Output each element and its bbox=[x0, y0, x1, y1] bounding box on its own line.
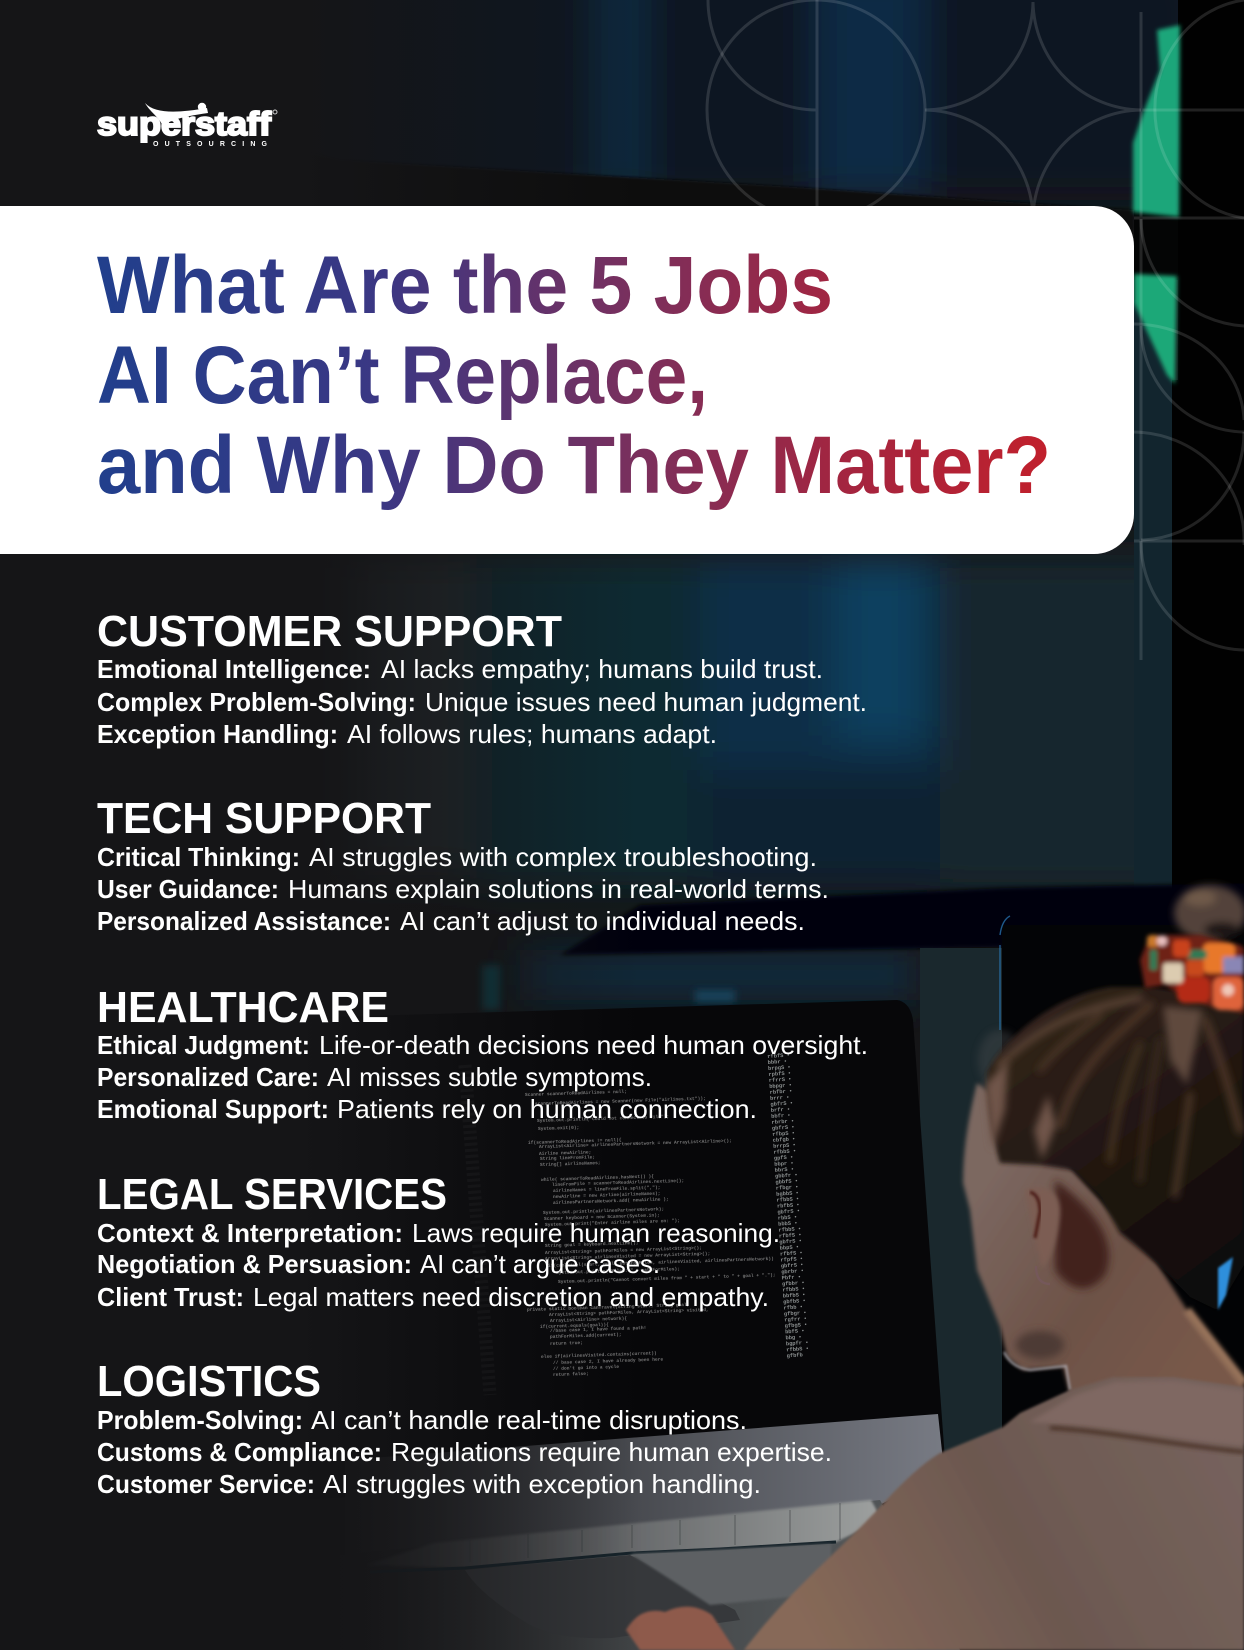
person: neck and face bbox=[963, 1083, 1244, 1395]
code on monitor: ArrayList<String> airlinesVisited = new ArrayList<String>(); bbox=[545, 1251, 710, 1262]
code right column bbox=[767, 1053, 809, 1359]
code on monitor: System.out.println(airlinesPartnersNetwork); bbox=[543, 1206, 664, 1216]
code right column: bbfS • bbox=[785, 1328, 805, 1335]
photo: side fade bbox=[0, 0, 640, 1650]
line: critical thinking: AI struggles with complex troubleshooting. bbox=[309, 842, 817, 872]
line: emotional support: Patients rely on human connection. bbox=[337, 1094, 757, 1124]
person: shoulder strap bbox=[1187, 1310, 1244, 1383]
person: black strip behind neck bbox=[1190, 1240, 1244, 1395]
section: tech support bbox=[97, 794, 829, 936]
line: personalized assistance: Personalized Assistance: bbox=[97, 906, 391, 936]
line: context and interpretation bbox=[97, 1218, 780, 1248]
line: negotiation and persuasion: Negotiation & Persuasion: bbox=[97, 1249, 412, 1279]
photo: monitor bezel bbox=[345, 1414, 944, 1555]
person: shadow under jaw bbox=[1016, 1331, 1064, 1359]
code right column: rfbfS • bbox=[780, 1250, 803, 1258]
line: client trust: Legal matters need discretion and empathy. bbox=[253, 1282, 769, 1312]
line: customer service: Customer Service: bbox=[97, 1469, 315, 1499]
code right column: rfbbS • bbox=[778, 1226, 801, 1234]
code right column: bgbbS • bbox=[776, 1190, 799, 1198]
code on monitor: return false; bbox=[553, 1371, 589, 1378]
photo: desk bbox=[340, 1500, 960, 1650]
line: customs and compliance: Regulations require human expertise. bbox=[391, 1437, 832, 1467]
section: customer support bbox=[97, 607, 867, 749]
line: emotional support bbox=[97, 1094, 757, 1124]
line: negotiation and persuasion: AI can’t argue cases. bbox=[420, 1249, 660, 1279]
person: hair root near bun bbox=[1163, 1006, 1203, 1085]
code right column: bbpgr • bbox=[769, 1082, 792, 1090]
code right column: gbfbS • bbox=[783, 1298, 806, 1305]
line: complex problem-solving: Complex Problem-Solving: bbox=[97, 687, 416, 717]
line: personalized care bbox=[97, 1062, 652, 1092]
line: problem-solving: AI can’t handle real-time disruptions. bbox=[311, 1405, 747, 1435]
code on monitor: System.out.println("Miles: " + pathForMiles); bbox=[556, 1266, 680, 1276]
person: sweater bbox=[744, 1377, 1244, 1650]
code on monitor: else if(airlinesVisited.contains(current)) bbox=[541, 1350, 657, 1360]
code right column: rbbS • bbox=[778, 1214, 797, 1222]
code right column: brrpS • bbox=[773, 1142, 796, 1150]
code right column: bbbS • bbox=[778, 1220, 798, 1228]
geometric line pattern bbox=[707, 0, 1244, 660]
line: ethical judgment bbox=[97, 1030, 868, 1060]
code right column: gbfrS • bbox=[770, 1100, 793, 1108]
line: emotional support: Emotional Support: bbox=[97, 1094, 329, 1124]
code right column: rfbgr • bbox=[776, 1184, 799, 1192]
line: personalized assistance bbox=[97, 906, 805, 936]
title card bbox=[0, 206, 1134, 554]
code right column: rbfbS • bbox=[777, 1202, 800, 1210]
code right column: rfbpS • bbox=[772, 1130, 795, 1138]
code on monitor: // don't go into a cycle bbox=[553, 1364, 619, 1372]
code right column: gbbfS • bbox=[775, 1178, 798, 1186]
code right column: gfbbr • bbox=[782, 1280, 805, 1288]
line: client trust: Client Trust: bbox=[97, 1282, 244, 1312]
code right column: rgfrr • bbox=[784, 1316, 807, 1323]
code on monitor: ArrayList<String> pathForMiles = new ArrayList<String>(); bbox=[545, 1245, 702, 1256]
line: personalized care: Personalized Care: bbox=[97, 1062, 319, 1092]
code right column: cbfgb • bbox=[773, 1136, 796, 1144]
line: emotional intelligence: AI lacks empathy; humans build trust. bbox=[381, 654, 823, 684]
code on monitor: System.out.println("Cannot convert miles from " + start + " to " + goal + "."); bbox=[558, 1272, 776, 1285]
code on monitor: String goal = keyboard.nextLine(); bbox=[545, 1240, 639, 1249]
code on monitor: private static boolean canTravel(String start, String goal, bbox=[527, 1302, 690, 1313]
photo: box bbox=[631, 1544, 831, 1605]
code right column: gbfrS • bbox=[781, 1262, 804, 1270]
code on monitor: if(canTravel(start, goal, pathForMiles, airlinesVisited, airlinesPartnersNetwork)) bbox=[548, 1256, 774, 1269]
heading: healthcare: HEALTHCARE bbox=[97, 983, 389, 1032]
photo: right black column bbox=[1178, 0, 1244, 1000]
logo: dot bbox=[198, 103, 206, 111]
section: healthcare bbox=[97, 983, 868, 1124]
heading: logistics: LOGISTICS bbox=[97, 1357, 321, 1406]
person: hair strands bbox=[1000, 998, 1240, 1195]
photo: hand bbox=[626, 1607, 735, 1650]
person: scrunchie bbox=[1140, 935, 1244, 1013]
person: collar crease bbox=[1050, 1428, 1244, 1452]
code on monitor: ArrayList<Airline> airlinesPartnersNetwork = new ArrayList<Airline>(); bbox=[539, 1138, 732, 1150]
person: skin wisp at temple bbox=[1034, 1095, 1056, 1160]
person: inner ear bbox=[1030, 1192, 1040, 1238]
code right column: bbbr • bbox=[768, 1059, 787, 1066]
line: user guidance: User Guidance: bbox=[97, 874, 279, 904]
person: hair bbox=[987, 987, 1244, 1310]
line: negotiation and persuasion bbox=[97, 1249, 660, 1279]
code on monitor: String lineFromFile; bbox=[540, 1154, 595, 1162]
code on monitor: scannerToReadAirlines = new Scanner(new File("airlines.txt")); bbox=[535, 1096, 706, 1107]
photo: keyboard underside bbox=[370, 1542, 836, 1572]
line: customs and compliance bbox=[97, 1437, 832, 1467]
line: customer service: AI struggles with exception handling. bbox=[323, 1469, 761, 1499]
title: What Are the 5 Jobs bbox=[97, 240, 833, 331]
code right column: rpbfS • bbox=[768, 1070, 791, 1078]
line: exception handling bbox=[97, 719, 717, 749]
code on monitor: Airline newAirline; bbox=[539, 1149, 591, 1157]
line: user guidance: Humans explain solutions in real-world terms. bbox=[288, 874, 829, 904]
code right column: bbg • bbox=[785, 1334, 802, 1341]
person: jaw rim light bbox=[1004, 1352, 1070, 1390]
code right column: rbrbr • bbox=[771, 1118, 794, 1126]
heading: legal services: LEGAL SERVICES bbox=[97, 1170, 447, 1219]
photo: second monitor bbox=[1002, 925, 1244, 1430]
code on monitor: return true; bbox=[550, 1340, 583, 1347]
code on monitor: // base case 2, I have already been here bbox=[553, 1357, 664, 1366]
person: shadow behind ear bbox=[1055, 1180, 1109, 1288]
code on monitor bbox=[525, 1089, 776, 1378]
person: ear bbox=[1025, 1187, 1060, 1268]
code right column: Pbfr • bbox=[781, 1274, 801, 1282]
line: context and interpretation: Laws require human reasoning. bbox=[412, 1218, 780, 1248]
code on monitor: newAirline = new Airline(airlineNames); bbox=[553, 1191, 661, 1200]
title: and Why Do They Matter? bbox=[97, 420, 1051, 511]
code line numbers bbox=[465, 1065, 490, 1395]
photo: monitor corner glow bbox=[1000, 916, 1010, 1030]
code right column: rfbbS • bbox=[782, 1286, 805, 1293]
line: critical thinking bbox=[97, 842, 817, 872]
person bbox=[744, 885, 1244, 1650]
section: logistics bbox=[97, 1357, 832, 1499]
logo: registered mark bbox=[273, 110, 277, 114]
heading: tech support: TECH SUPPORT bbox=[97, 794, 431, 843]
line: complex problem-solving bbox=[97, 687, 867, 717]
code right column: rfbfS • bbox=[767, 1053, 790, 1060]
line: complex problem-solving: Unique issues need human judgment. bbox=[425, 687, 867, 717]
line: personalized assistance: AI can’t adjust to individual needs. bbox=[400, 906, 805, 936]
code on monitor: lineFromFile = scannerToReadAirlines.nextLine(); bbox=[552, 1178, 684, 1188]
code right column: brpgS • bbox=[768, 1065, 791, 1072]
code right column: gbfrS • bbox=[779, 1238, 802, 1246]
line: ethical judgment: Life-or-death decisions need human oversight. bbox=[319, 1030, 868, 1060]
photo: main monitor bbox=[300, 1000, 945, 1500]
logo bbox=[97, 103, 277, 148]
code right column: gbfrS • bbox=[777, 1208, 800, 1216]
photo: green lights bbox=[1133, 25, 1180, 384]
photo: dark beam top bbox=[300, 150, 1134, 240]
photo: black band bbox=[560, 883, 1244, 955]
code right column: bbpr • bbox=[774, 1161, 794, 1168]
code on monitor: String[] airlineNames; bbox=[540, 1160, 601, 1168]
line: exception handling: AI follows rules; humans adapt. bbox=[347, 719, 717, 749]
line: customer service bbox=[97, 1469, 761, 1499]
code on monitor: System.out.println("Could not connect to file"); bbox=[537, 1114, 669, 1124]
line: problem-solving: Problem-Solving: bbox=[97, 1405, 303, 1435]
photo: teal dots bbox=[482, 965, 735, 1010]
title bbox=[97, 240, 1051, 511]
person: blue light bbox=[1218, 1257, 1233, 1310]
code right column: brrr • bbox=[770, 1095, 790, 1102]
code right column: rfbbS • bbox=[773, 1148, 796, 1156]
code right column: gfbgr • bbox=[784, 1310, 807, 1317]
code right column: bbfr • bbox=[771, 1113, 791, 1120]
person: hair bun bbox=[1174, 885, 1244, 941]
code right column: bgpfr • bbox=[786, 1340, 809, 1347]
code on monitor: airlinesPartnersNetwork.add( newAirline ); bbox=[553, 1196, 669, 1206]
code right column: gbrbr • bbox=[781, 1268, 804, 1276]
photo: keyboard bbox=[366, 1500, 882, 1568]
heading: customer support: CUSTOMER SUPPORT bbox=[97, 607, 562, 656]
line: personalized care: AI misses subtle symptoms. bbox=[327, 1062, 652, 1092]
code on monitor: System.out.print("Enter airline miles are on: "); bbox=[545, 1218, 680, 1228]
code on monitor: if(current.equals(goal)){ bbox=[540, 1322, 609, 1330]
code on monitor: ArrayList<String> pathForMiles, ArrayList<String> visited, bbox=[549, 1307, 709, 1318]
code right column: rfbb • bbox=[783, 1304, 803, 1311]
code right column: gfbfb bbox=[786, 1352, 803, 1359]
code on monitor: Scanner scannerToReadAirlines = null; bbox=[525, 1089, 627, 1098]
code on monitor: System.exit(0); bbox=[538, 1125, 579, 1132]
code on monitor: airlineNames = lineFromFile.split(","); bbox=[553, 1185, 661, 1194]
line: context and interpretation: Context & Interpretation: bbox=[97, 1218, 403, 1248]
code right column: rfrrS • bbox=[769, 1076, 792, 1084]
code right column: rbfbr • bbox=[769, 1088, 792, 1096]
line: critical thinking: Critical Thinking: bbox=[97, 842, 300, 872]
photo: wall between monitors bbox=[920, 948, 1004, 1454]
line: ethical judgment: Ethical Judgment: bbox=[97, 1030, 310, 1060]
person: earring bbox=[1036, 1266, 1050, 1284]
code right column: rfbbS • bbox=[786, 1346, 809, 1353]
code on monitor: //base case 1, I have found a path! bbox=[550, 1325, 647, 1334]
line: exception handling: Exception Handling: bbox=[97, 719, 338, 749]
logo: wordmark: superstaff bbox=[97, 105, 272, 142]
line: customs and compliance: Customs & Compliance: bbox=[97, 1437, 382, 1467]
line: emotional intelligence bbox=[97, 654, 823, 684]
photo: key gaps bbox=[470, 1503, 840, 1562]
code right column: gbfrS • bbox=[772, 1124, 795, 1132]
code right column: bbpS • bbox=[780, 1244, 799, 1252]
code right column: brfr • bbox=[771, 1107, 790, 1114]
code right column: gfbgS • bbox=[785, 1322, 808, 1329]
photo: monitor stand bbox=[465, 1555, 740, 1638]
line: problem-solving bbox=[97, 1405, 747, 1435]
person: halo of stray hair bbox=[978, 1030, 1022, 1090]
logo: tagline: OUTSOURCING bbox=[153, 141, 268, 148]
person: collar highlight bbox=[1030, 1381, 1244, 1445]
code on monitor: while( scannerToReadAirlines.hasNext() ){ bbox=[541, 1173, 654, 1183]
code on monitor: Scanner keyboard = new Scanner(System.in); bbox=[544, 1212, 660, 1222]
photo: blurred server room bbox=[300, 0, 1200, 1000]
code right column: gpfS • bbox=[774, 1155, 793, 1162]
code on monitor: ArrayList<Airline> network){ bbox=[550, 1316, 627, 1324]
line: emotional intelligence: Emotional Intelligence: bbox=[97, 654, 371, 684]
code right column: rfpfS • bbox=[780, 1256, 803, 1264]
title: AI Can’t Replace, bbox=[97, 330, 708, 421]
code right column: bbrS • bbox=[774, 1167, 794, 1174]
code on monitor: pathForMiles.add(current); bbox=[550, 1332, 622, 1340]
section: legal services bbox=[97, 1170, 780, 1312]
code right column: rfbfS • bbox=[779, 1232, 802, 1240]
person: skin showing at hairline bbox=[985, 1060, 1008, 1150]
code right column: gbbfr • bbox=[775, 1172, 798, 1180]
code on monitor: if(scannerToReadAirlines != null){ bbox=[528, 1137, 622, 1146]
code right column: rfbbS • bbox=[776, 1196, 799, 1204]
code right column: bbfbS • bbox=[783, 1292, 806, 1299]
logo: swoosh figure bbox=[145, 103, 208, 126]
